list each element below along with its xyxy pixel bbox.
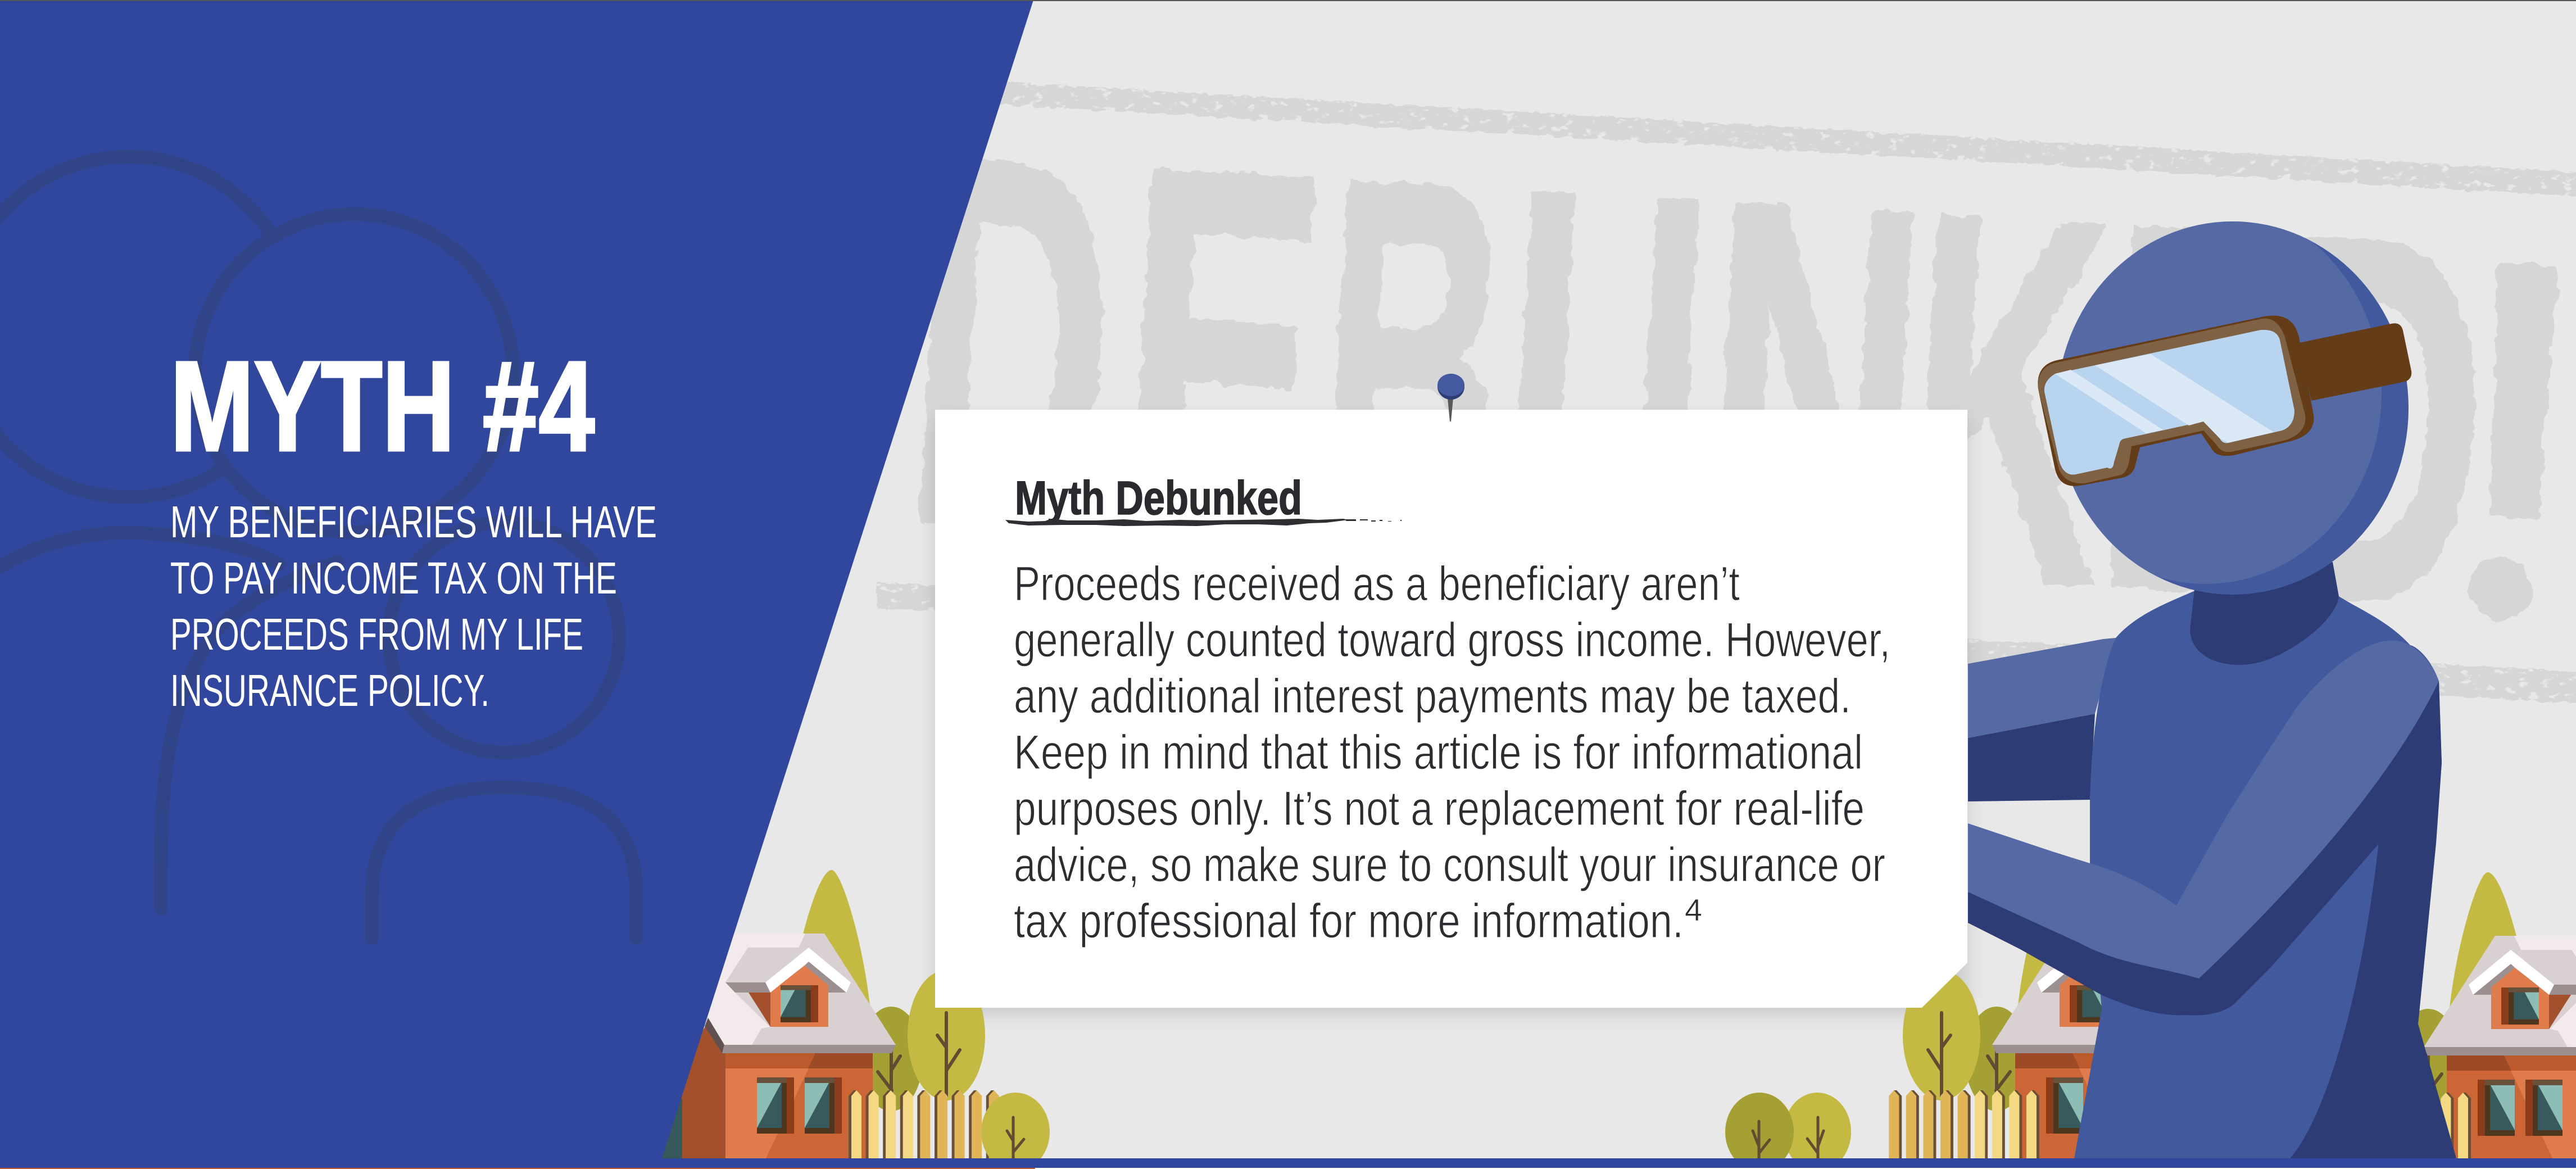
house and trees: center [1889, 953, 2102, 1158]
myth statement: MY BENEFICIARIES WILL HAVE [170, 497, 657, 547]
blue panel [0, 0, 1033, 1169]
stamp word: E [1106, 58, 1338, 649]
exclamation dot [2469, 534, 2565, 632]
myth title: MYTH #4 [170, 336, 595, 478]
house and trees: left [652, 870, 999, 1158]
stamp word [896, 47, 2576, 737]
small trees: center [1725, 1093, 1851, 1158]
card body text: tax professional for more information. [1014, 894, 1684, 948]
torso [2074, 591, 2456, 1158]
back arm [1968, 638, 2116, 801]
myth statement: INSURANCE POLICY. [170, 665, 489, 715]
debunked stamp watermark [877, 47, 2576, 737]
card body text: purposes only. It’s not a replacement for real-life [1014, 782, 1865, 836]
stamp word: E [2089, 115, 2287, 704]
card heading: Myth Debunked [1015, 472, 1302, 524]
stamp top band [955, 79, 2576, 197]
stamp word: B [1305, 69, 1521, 660]
card body text: generally counted toward gross income. However, [1014, 613, 1890, 667]
head [2030, 203, 2409, 595]
neighborhood illustration [652, 870, 2576, 1169]
people outlines [0, 157, 636, 938]
card body text: advice, so make sure to consult your insurance or [1014, 838, 1885, 892]
card body text: Keep in mind that this article is for informational [1014, 726, 1863, 780]
stamp word: D [896, 47, 1128, 638]
myth statement [170, 497, 657, 715]
card shadow [935, 419, 1967, 1014]
goggle lens [2044, 330, 2294, 474]
goggle frame [2038, 316, 2314, 486]
neck [2190, 562, 2339, 665]
card [935, 410, 1967, 1008]
front arm [1968, 641, 2439, 978]
small tree: left [981, 1093, 1050, 1158]
goggles [2038, 316, 2411, 486]
arm shadow [1968, 681, 2439, 1016]
stamp word: U [1490, 80, 1721, 671]
stamp word: K [1894, 103, 2121, 695]
side shadow [2290, 681, 2456, 1158]
house and trees: right [2418, 872, 2576, 1158]
card body text: 4 [1685, 892, 1702, 927]
card body text: Proceeds received as a beneficiary aren’t [1014, 557, 1740, 611]
myth statement: PROCEEDS FROM MY LIFE [170, 609, 583, 659]
card body text [1014, 557, 1890, 948]
card body text: any additional interest payments may be taxed. [1014, 669, 1851, 723]
myth statement: TO PAY INCOME TAX ON THE [170, 553, 617, 603]
figure with goggles [1968, 203, 2456, 1158]
pin [1437, 374, 1464, 422]
top edge line [0, 0, 2576, 1]
stamp bottom band [877, 582, 2576, 704]
bottom bar [0, 1158, 2576, 1169]
goggle strap [2299, 323, 2411, 401]
stamp word: N [1689, 92, 1938, 684]
brush underline [1005, 519, 1402, 526]
